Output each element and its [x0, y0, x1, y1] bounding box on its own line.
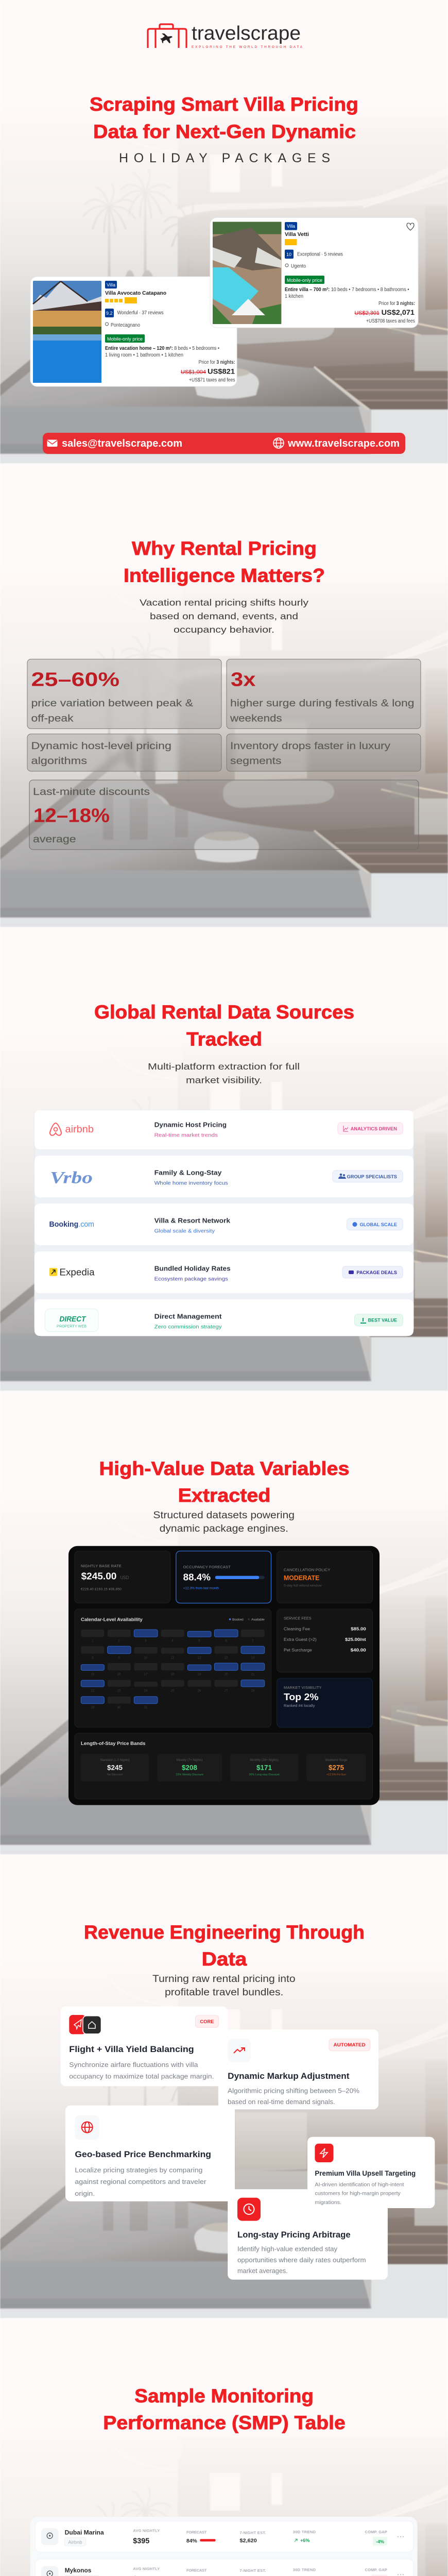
card: flight + villa yield balancing	[61, 2006, 228, 2086]
calendar day numbers: 4	[171, 1640, 174, 1643]
card: flight + villa yield balancing: Flight + Villa Yield Balancing	[69, 2044, 194, 2054]
section heading: revenue engineering: Turning raw rental pricing into	[152, 1974, 296, 1985]
listing card: Villa Avvocato Catapano: Villa Avvocato Catapano	[105, 290, 166, 296]
calendar day numbers: 27	[225, 1690, 228, 1693]
row: vrbo: Whole home inventory focus	[154, 1180, 228, 1186]
calendar day numbers: 11	[171, 1656, 175, 1659]
stat card: last-minute discounts: average	[33, 834, 76, 845]
card: calendar availability: Calendar-Level Availability	[81, 1617, 143, 1623]
section heading: data sources: Tracked	[186, 1029, 262, 1050]
row: vrbo: Vrbo	[50, 1168, 93, 1187]
contact bar: sales@travelscrape.com	[62, 438, 182, 449]
calendar day numbers: 24	[144, 1690, 148, 1693]
panel: monitoring table	[30, 2517, 418, 2576]
row: Mykonos: 30D TREND	[293, 2568, 316, 2572]
listing card: Villa Vetti: US$2,301	[354, 310, 380, 316]
row: airbnb: Real-time market trends	[154, 1132, 218, 1138]
calendar day numbers	[91, 1640, 255, 1709]
card: market visibility: Ranked #4 locally	[284, 1704, 315, 1708]
card: cancellation policy: 5-day full refund window	[284, 1584, 322, 1587]
price band: weekly: Weekly (7+ Nights)	[177, 1759, 202, 1762]
card: nightly base rate: €226.40 £193.15 ¥36,850	[81, 1587, 122, 1591]
calendar day numbers: 17	[144, 1673, 148, 1676]
row: expedia: Expedia	[59, 1267, 95, 1278]
card: market visibility: MARKET VISIBILITY	[284, 1685, 322, 1690]
row: booking: GLOBAL SCALE	[359, 1222, 397, 1228]
calendar day numbers: 31	[144, 1706, 148, 1709]
card: occupancy forecast: OCCUPANCY FORECAST	[183, 1565, 231, 1569]
row: Dubai Marina: $395	[133, 2537, 149, 2546]
card: occupancy forecast: +12.3% from last month	[183, 1587, 219, 1590]
card: geo-based price benchmarking: Localize pricing strategies by comparing	[75, 2167, 202, 2174]
listing card: Villa Avvocato Catapano: Pontecagnano	[111, 323, 140, 328]
listing card: Villa Vetti: US$2,071	[382, 308, 415, 316]
listing card: Villa Avvocato Catapano: Wonderful · 37 reviews	[117, 310, 164, 316]
stat card: price variation: 25–60%	[31, 669, 119, 691]
price band: standard: No Discount	[107, 1773, 123, 1776]
card: service fees: Extra Guest (>2)	[284, 1637, 317, 1642]
calendar day numbers: 22	[91, 1690, 95, 1693]
row: airbnb: Dynamic Host Pricing	[154, 1121, 227, 1128]
row: booking: Booking.com	[49, 1221, 94, 1229]
calendar day numbers: 7	[252, 1640, 254, 1643]
row: airbnb	[50, 1121, 403, 1138]
row: Mykonos: FORECAST	[186, 2568, 207, 2572]
row: Dubai Marina: 84%	[186, 2538, 197, 2544]
price band: monthly: $171	[256, 1764, 272, 1771]
listing card: Villa Vetti: Entire villa – 700 m²: 10 beds • 7 bedrooms • 8 bathrooms •	[285, 287, 409, 293]
section heading: why rental pricing: Why Rental Pricing	[132, 538, 317, 559]
logo: travelscrape header	[148, 23, 303, 49]
calendar day numbers: 10	[144, 1656, 148, 1659]
listing card: Villa Vetti: Exceptional · 5 reviews	[297, 251, 343, 258]
price band: monthly: Monthly (28+ Nights)	[250, 1759, 279, 1762]
listing card: Villa Avvocato Catapano: Villa	[107, 282, 115, 287]
row: expedia: Ecosystem package savings	[154, 1276, 228, 1282]
calendar day numbers: 9	[118, 1656, 120, 1659]
stat card: inventory: segments	[230, 756, 281, 767]
row: expedia	[49, 1265, 403, 1282]
calendar day numbers: 15	[91, 1673, 95, 1676]
card: long-stay pricing arbitrage: opportunities where daily rates outperform	[237, 2257, 366, 2264]
row: Dubai Marina: +6%	[300, 2538, 310, 2544]
row: Dubai Marina: 7-NIGHT EST.	[240, 2530, 266, 2535]
row: expedia: PACKAGE DEALS	[356, 1270, 397, 1276]
section heading: data sources	[94, 1002, 354, 1085]
row: vrbo	[50, 1168, 403, 1187]
row: airbnb: ANALYTICS DRIVEN	[351, 1126, 397, 1132]
icon: heart	[407, 223, 414, 230]
calendar day numbers: 18	[171, 1673, 175, 1676]
listing card: Villa Avvocato Catapano: Entire vacation home – 120 m²: 8 beds • 5 bedrooms •	[105, 346, 219, 351]
row: direct: Zero commission strategy	[154, 1324, 222, 1330]
listing card: Villa Avvocato Catapano: Price for 3 nights:	[199, 360, 235, 365]
price band: monthly	[230, 1754, 298, 1782]
card: service fees: $85.00	[351, 1626, 366, 1631]
row: Dubai Marina: Airbnb	[68, 2539, 82, 2545]
card: dynamic markup adjustment: based on real-time demand signals.	[228, 2098, 335, 2106]
card: premium villa upsell targeting: AI-driven identification of high-intent	[315, 2181, 404, 2188]
price band: weekly: $208	[182, 1764, 198, 1771]
listing card: Villa Avvocato Catapano: US$821	[208, 367, 235, 375]
card: nightly base rate: $245.00	[81, 1571, 116, 1582]
row: vrbo: Family & Long-Stay	[154, 1169, 222, 1176]
section heading: revenue engineering: profitable travel bundles.	[165, 1987, 283, 1998]
rating stars	[105, 297, 137, 303]
panel: data sources table	[35, 1110, 413, 1336]
calendar day numbers: 2	[118, 1640, 120, 1643]
listing card: Villa Vetti: +US$708 taxes and fees	[366, 318, 415, 324]
section heading: smp table: Sample Monitoring	[134, 2385, 314, 2406]
card: cancellation policy: MODERATE	[284, 1574, 319, 1582]
photo: villa with pool	[33, 281, 101, 383]
listing card: Villa Vetti: Ugento	[291, 264, 306, 269]
section heading: why rental pricing: occupancy behavior.	[174, 624, 274, 635]
stat card: surge	[0, 464, 448, 927]
stat card: last-minute discounts: Last-minute discounts	[33, 787, 150, 798]
card: premium villa upsell targeting: customers for high-margin property	[315, 2191, 401, 2197]
stat card: dynamic host pricing: algorithms	[31, 756, 87, 767]
icon: clock	[237, 2198, 261, 2221]
title	[90, 94, 358, 165]
row: Dubai Marina: COMP. GAP	[365, 2530, 387, 2534]
row: Dubai Marina: AVG NIGHTLY	[133, 2529, 160, 2533]
card: service fees: Pet Surcharge	[284, 1648, 312, 1653]
price band: weekend: +12.5% Fri-Sun	[326, 1773, 346, 1776]
card: calendar availability	[75, 1609, 271, 1727]
listing card: Villa Vetti: Villa	[287, 224, 295, 229]
stat card: surge: weekends	[230, 713, 282, 724]
stat card: last-minute discounts: 12–18%	[33, 805, 110, 827]
card: long-stay pricing arbitrage: Long-stay Pricing Arbitrage	[237, 2230, 351, 2240]
row: booking: Villa & Resort Network	[154, 1217, 230, 1224]
card: long-stay pricing arbitrage: market averages.	[237, 2267, 288, 2275]
row: Mykonos: Mykonos	[65, 2567, 92, 2574]
card: service fees: SERVICE FEES	[284, 1616, 312, 1621]
card: premium villa upsell targeting: migrations.	[315, 2199, 341, 2206]
listing card: Villa Vetti: Mobile-only price	[287, 278, 322, 283]
calendar day numbers: 3	[145, 1640, 147, 1643]
calendar day numbers: 28	[251, 1690, 255, 1693]
listing card: Villa Avvocato Catapano: Mobile-only price	[107, 336, 143, 342]
card: occupancy forecast: 88.4%	[183, 1572, 211, 1582]
section heading: data sources: market visibility.	[186, 1075, 262, 1085]
listing card: Villa Vetti: 10	[286, 252, 291, 257]
price band: weekly: 15% Weekly Discount	[176, 1773, 203, 1776]
calendar grid	[81, 1630, 265, 1704]
card: market visibility	[277, 1678, 373, 1727]
card: dynamic markup adjustment: AUTOMATED	[334, 2042, 366, 2047]
calendar day numbers: 19	[198, 1673, 201, 1676]
icon: globe	[75, 2115, 99, 2140]
card: nightly base rate	[75, 1551, 170, 1603]
section heading: why rental pricing: based on demand, events, and	[150, 611, 298, 621]
stat card: price variation: price variation between peak &	[31, 698, 193, 709]
stat card: surge: higher surge during festivals & long	[230, 698, 414, 709]
calendar day numbers: 30	[117, 1706, 121, 1709]
card: dynamic markup adjustment: Algorithmic pricing shifting between 5–20%	[228, 2088, 359, 2095]
stat card: inventory	[0, 464, 448, 927]
section heading: data variables: dynamic package engines.	[160, 1523, 288, 1534]
listing card: Villa Vetti: Price for 3 nights:	[378, 301, 415, 307]
price band: standard: $245	[107, 1764, 123, 1771]
calendar day numbers: 23	[117, 1690, 121, 1693]
stat card: price variation: off-peak	[31, 713, 74, 724]
row: direct: DIRECT	[59, 1315, 86, 1324]
price band: standard: Standard (1-3 Nights)	[100, 1759, 130, 1762]
calendar day numbers: 25	[171, 1690, 175, 1693]
photo: aerial villa with pool	[213, 222, 281, 324]
listing card: Villa Avvocato Catapano: 9.2	[106, 311, 113, 316]
listing card: Villa Vetti: 1 kitchen	[285, 294, 303, 299]
section heading: why rental pricing	[124, 538, 325, 635]
card: occupancy forecast	[176, 1551, 271, 1603]
card: market visibility: Top 2%	[284, 1692, 319, 1702]
calendar day numbers: 13	[225, 1656, 228, 1659]
calendar day numbers: 14	[251, 1656, 255, 1659]
section heading: smp table: Performance (SMP) Table	[103, 2412, 346, 2433]
icon: trend	[228, 2039, 251, 2062]
listing card: Villa Vetti	[210, 217, 418, 328]
card: nightly base rate: USD	[120, 1575, 129, 1580]
section heading: smp table	[103, 2385, 346, 2433]
price band: weekend: $275	[329, 1764, 344, 1771]
row: direct: PROPERTY WEB	[57, 1325, 87, 1329]
icon: plane and house	[69, 2015, 101, 2034]
card: length of stay price bands: Length-of-Stay Price Bands	[81, 1741, 145, 1747]
icon: globe	[273, 438, 284, 448]
legend	[229, 1618, 265, 1621]
card: cancellation policy	[277, 1551, 373, 1603]
card: service fees: Cleaning Fee	[284, 1626, 310, 1631]
card: flight + villa yield balancing: occupancy to maximize total package margin.	[69, 2073, 214, 2080]
icon: mail	[47, 440, 58, 447]
calendar day numbers: 16	[117, 1673, 121, 1676]
calendar day numbers: 8	[92, 1656, 94, 1659]
row: Dubai Marina: Dubai Marina	[65, 2529, 104, 2536]
card: cancellation policy: CANCELLATION POLICY	[284, 1568, 330, 1572]
stat card: surge: 3x	[231, 669, 255, 691]
row: vrbo: GROUP SPECIALISTS	[347, 1174, 397, 1180]
card: flight + villa yield balancing: CORE	[200, 2019, 214, 2025]
logo: travelscrape header: EXPLORING THE WORLD THROUGH DATA	[192, 45, 303, 49]
section heading: data variables: High-Value Data Variables	[99, 1458, 349, 1479]
card: long-stay pricing arbitrage	[228, 2189, 388, 2280]
section heading: why rental pricing: Vacation rental pricing shifts hourly	[140, 598, 308, 608]
card: flight + villa yield balancing: Synchronize airfare fluctuations with villa	[69, 2061, 198, 2069]
card: long-stay pricing arbitrage: Identify high-value extended stay	[237, 2246, 338, 2253]
icon: bolt	[315, 2144, 334, 2162]
row: Mykonos: AVG NIGHTLY	[133, 2566, 160, 2571]
listing card: Villa Avvocato Catapano: +US$71 taxes and fees	[189, 377, 235, 383]
row: Dubai Marina: 30D TREND	[293, 2530, 316, 2534]
listing card: Villa Avvocato Catapano	[30, 277, 237, 386]
row: direct	[45, 1309, 403, 1332]
listing card: Villa Avvocato Catapano: 1 living room • 1 bathroom • 1 kitchen	[105, 352, 183, 358]
row: Dubai Marina: FORECAST	[186, 2530, 207, 2535]
calendar day numbers: 6	[225, 1640, 227, 1643]
stat card: dynamic host pricing	[0, 464, 448, 927]
title: Scraping Smart Villa Pricing	[90, 94, 358, 115]
calendar day numbers: 1	[92, 1640, 94, 1643]
calendar day numbers: 29	[91, 1706, 95, 1709]
card: premium villa upsell targeting	[307, 2137, 435, 2208]
card: premium villa upsell targeting: Premium Villa Upsell Targeting	[315, 2170, 416, 2177]
price band: weekly	[158, 1754, 222, 1782]
contact bar: www.travelscrape.com	[287, 438, 400, 449]
card: geo-based price benchmarking	[65, 2106, 235, 2201]
calendar day numbers: 5	[198, 1640, 200, 1643]
listing card: Villa Avvocato Catapano: US$1,004	[181, 369, 206, 375]
stat card: dynamic host pricing: Dynamic host-level pricing	[31, 741, 171, 752]
card: geo-based price benchmarking: origin.	[75, 2190, 95, 2197]
stat card: price variation	[0, 464, 448, 927]
row: Mykonos	[35, 2559, 413, 2576]
row: Mykonos: COMP. GAP	[365, 2568, 387, 2572]
card: service fees: $25.00/nt	[345, 1637, 366, 1642]
title: Data for Next-Gen Dynamic	[93, 121, 356, 142]
calendar day numbers: 26	[198, 1690, 201, 1693]
card: service fees: $40.00	[351, 1648, 366, 1653]
section heading: revenue engineering	[84, 1922, 365, 1998]
row: Dubai Marina	[35, 2521, 413, 2552]
section heading: revenue engineering: Data	[202, 1948, 247, 1970]
panel: dark dashboard	[68, 1546, 380, 1805]
calendar day numbers: 20	[225, 1673, 228, 1676]
row: booking	[49, 1217, 403, 1234]
calendar day numbers: 12	[198, 1656, 201, 1659]
row: Mykonos: 7-NIGHT EST.	[240, 2568, 266, 2573]
price band: weekend	[306, 1754, 366, 1782]
row: expedia: Bundled Holiday Rates	[154, 1265, 231, 1272]
section heading: data variables: Structured datasets powering	[153, 1510, 295, 1521]
price band: monthly: 30% Long-stay Discount	[249, 1773, 280, 1776]
card: dynamic markup adjustment: Dynamic Markup Adjustment	[228, 2071, 350, 2081]
section heading: data sources: Global Rental Data Sources	[94, 1002, 354, 1023]
legend: Available	[251, 1618, 265, 1621]
card: service fees	[277, 1609, 373, 1672]
price band: weekend: Weekend Surge	[325, 1759, 348, 1762]
row: booking: Global scale & diversity	[154, 1228, 215, 1234]
price band: standard	[81, 1754, 149, 1782]
contact bar	[43, 433, 405, 454]
section heading: revenue engineering: Revenue Engineering Through	[84, 1922, 365, 1943]
row: direct: Direct Management	[154, 1313, 222, 1320]
card: dynamic markup adjustment	[218, 2029, 378, 2109]
legend: Booked	[232, 1618, 244, 1621]
stat card: last-minute discounts	[29, 780, 419, 850]
card: length of stay price bands	[75, 1733, 373, 1799]
row: direct: BEST VALUE	[368, 1318, 397, 1324]
card: geo-based price benchmarking: Geo-based Price Benchmarking	[75, 2149, 211, 2159]
listing card: Villa Vetti: Villa Vetti	[285, 231, 309, 238]
card: geo-based price benchmarking: against regional competitors and traveler	[75, 2178, 206, 2185]
row: Dubai Marina: $2,620	[240, 2538, 257, 2544]
section heading: data variables	[99, 1458, 349, 1534]
section heading: data variables: Extracted	[178, 1485, 270, 1506]
row: Dubai Marina: -4%	[376, 2539, 385, 2545]
card: nightly base rate: NIGHTLY BASE RATE	[81, 1564, 122, 1568]
logo: travelscrape header: travelscrape	[192, 23, 301, 44]
calendar day numbers: 21	[251, 1673, 255, 1676]
stat card: inventory: Inventory drops faster in luxury	[230, 741, 391, 752]
section heading: data sources: Multi-platform extraction for full	[148, 1061, 300, 1072]
row: airbnb: airbnb	[65, 1124, 94, 1135]
title: HOLIDAY PACKAGES	[119, 151, 330, 165]
section heading: why rental pricing: Intelligence Matters?	[124, 565, 325, 586]
